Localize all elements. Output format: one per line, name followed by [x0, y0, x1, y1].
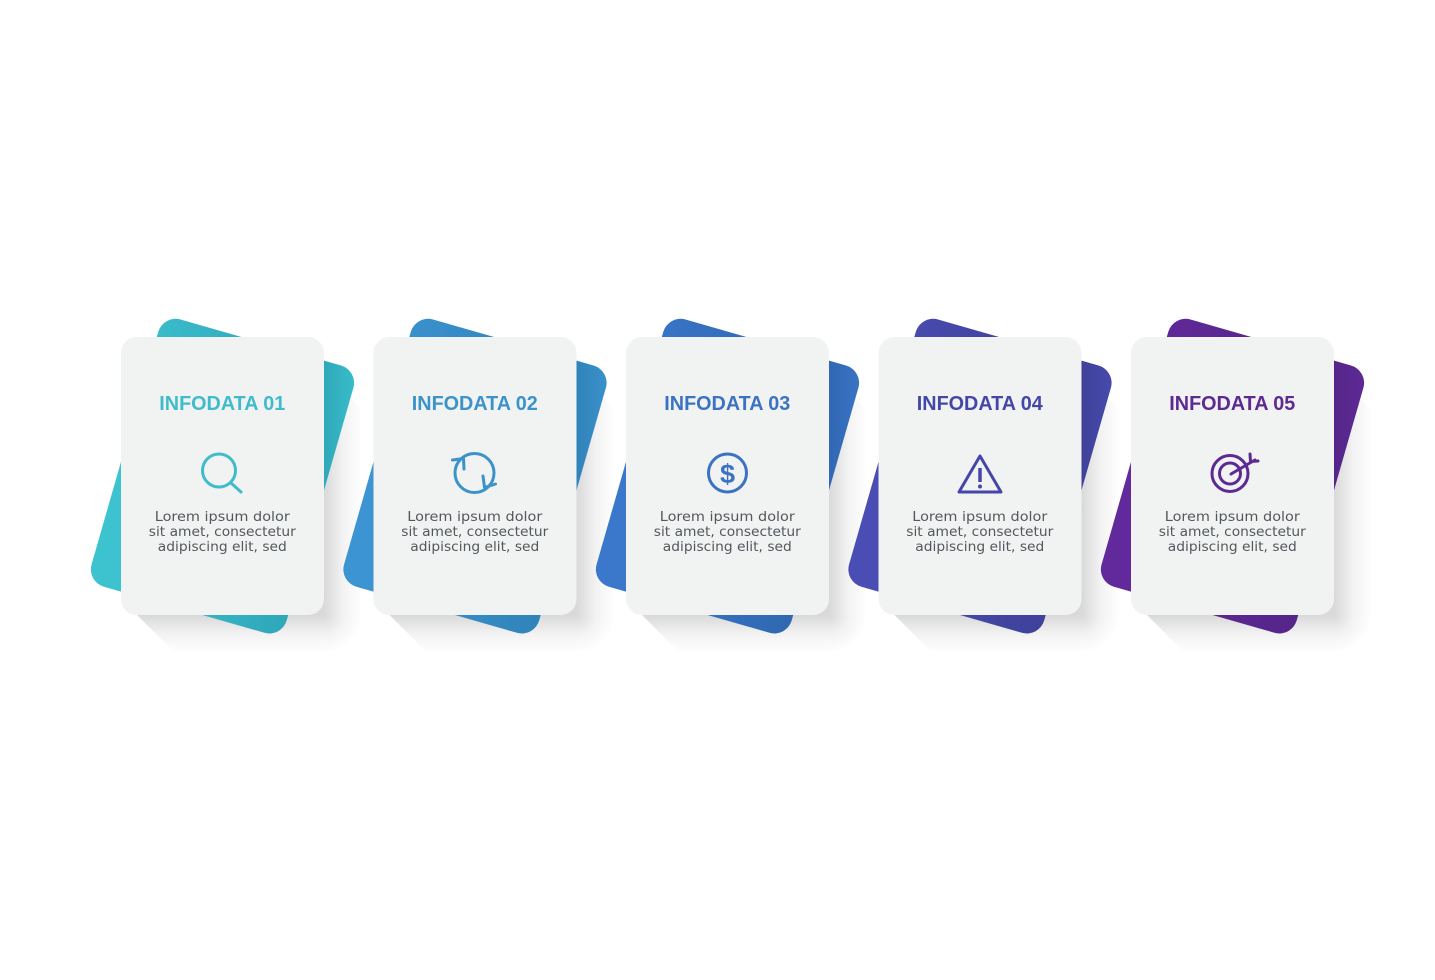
front panel 2	[374, 337, 576, 615]
rotated back panel 5	[1097, 315, 1368, 638]
long shadow 2	[390, 372, 614, 653]
card 4: INFODATA 04	[844, 315, 1120, 653]
body text 1: adipiscing elit, sed	[158, 540, 287, 555]
card 1: INFODATA 01	[87, 315, 362, 653]
body text 5: adipiscing elit, sed	[1168, 540, 1297, 555]
heading 4: INFODATA 04	[917, 393, 1044, 415]
front panel 4	[878, 337, 1082, 615]
icon: magnifier	[202, 454, 241, 492]
rotated back panel 3	[592, 315, 863, 638]
heading 2: INFODATA 02	[412, 393, 538, 415]
icon: warning triangle	[959, 456, 1001, 492]
heading 3: INFODATA 03	[664, 393, 790, 415]
long shadow 3	[642, 372, 867, 653]
rotated back panel 4	[844, 315, 1116, 638]
body text 4: Lorem ipsum dolor	[912, 510, 1048, 525]
body text 3: Lorem ipsum dolor	[660, 510, 796, 525]
card 5: INFODATA 05	[1097, 315, 1372, 653]
rotated back panel 2	[339, 315, 611, 638]
front panel 5	[1131, 337, 1334, 615]
long shadow 4	[894, 372, 1120, 653]
body text 3: sit amet, consectetur	[654, 525, 801, 540]
body text 5: sit amet, consectetur	[1159, 525, 1306, 540]
body text 1: sit amet, consectetur	[149, 525, 296, 540]
front panel 1	[121, 337, 324, 615]
rotated back panel 1	[87, 315, 358, 638]
body text 4: sit amet, consectetur	[906, 525, 1054, 540]
card 3: INFODATA 03	[592, 315, 867, 653]
body text 4: adipiscing elit, sed	[915, 540, 1044, 555]
body text 2: adipiscing elit, sed	[410, 540, 539, 555]
body text 3: adipiscing elit, sed	[663, 540, 792, 555]
body text 2: sit amet, consectetur	[401, 525, 549, 540]
long shadow 5	[1147, 372, 1372, 653]
body text 2: Lorem ipsum dolor	[407, 510, 543, 525]
body text 5: Lorem ipsum dolor	[1165, 510, 1301, 525]
long shadow 1	[137, 372, 362, 653]
icon: dollar coin: $	[720, 459, 735, 489]
heading 5: INFODATA 05	[1169, 393, 1295, 415]
icon: dollar coin	[708, 454, 746, 492]
body text 1: Lorem ipsum dolor	[155, 510, 291, 525]
icon: target with dart	[1212, 454, 1258, 492]
front panel 3	[626, 337, 829, 615]
icon: refresh arrows	[452, 454, 496, 492]
card 2: INFODATA 02	[339, 315, 614, 653]
heading 1: INFODATA 01	[159, 393, 285, 415]
